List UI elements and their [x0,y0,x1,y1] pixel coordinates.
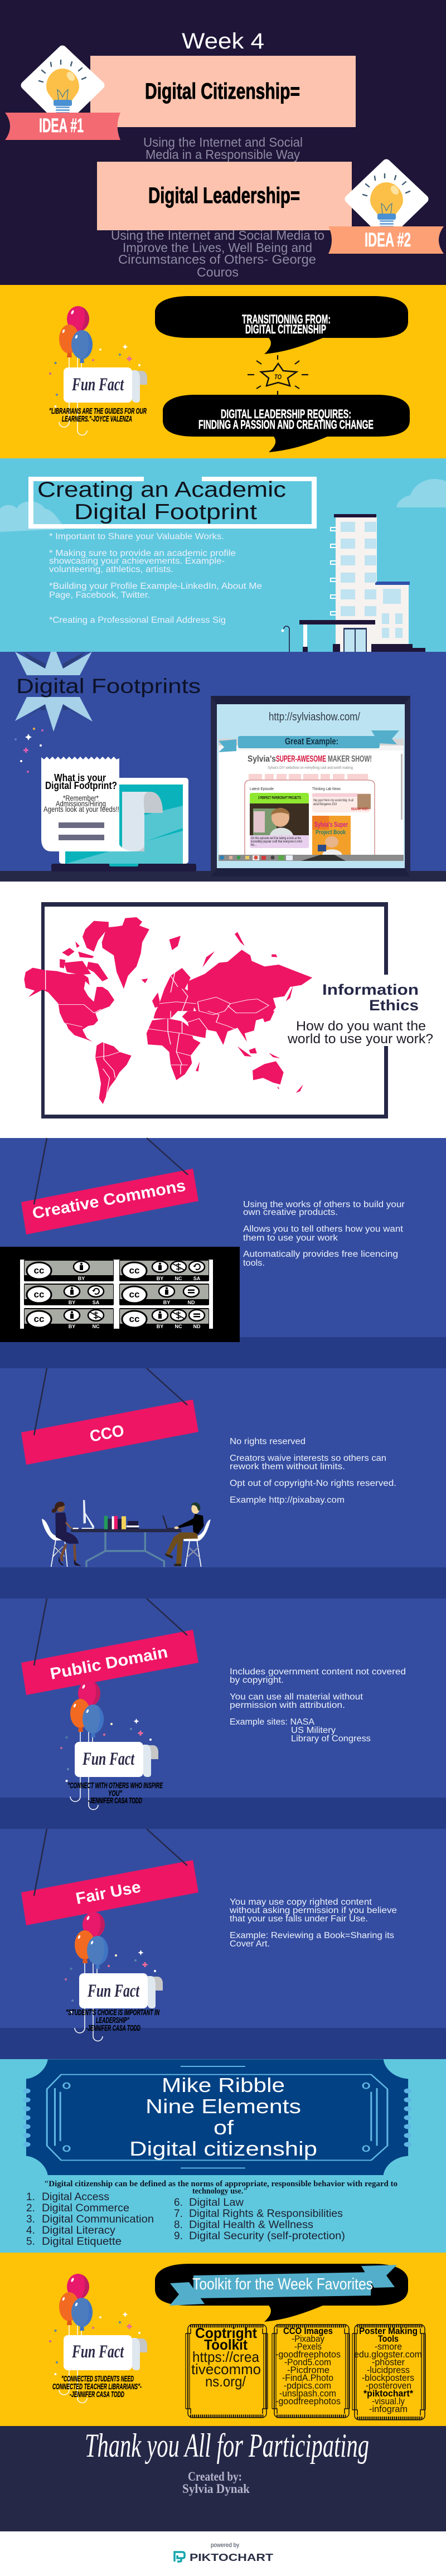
receipt: what is your digital footprint: Agents look at your feeds!! [43,805,119,814]
badge: cc by nc nd: BY [157,1324,163,1329]
screenshot book cover [312,816,351,855]
panel: poster making tools: edu.glogster.com [354,2349,422,2360]
text: public domain: Includes government content not covered [230,1667,406,1677]
label: idea 1: IDEA #1 [39,115,84,137]
text: creative commons: them to use your work [243,1233,338,1243]
clouds [0,479,446,532]
text: cco: No rights reserved [230,1437,306,1446]
icon: star with "to" [248,355,308,395]
heading: digital leadership: Digital Leadership= [148,183,300,208]
badge: cc by nc nd: cc [129,1314,139,1324]
dark floor strip [0,871,446,882]
quote: connected students: "CONNECTED STUDENTS NEED [61,2374,134,2384]
receipt: what is your digital footprint: *Remember* [63,793,99,802]
badge: cc by nd: cc [129,1289,139,1300]
badge: cc by: BY [78,1276,85,1281]
list: elements 1 to 5: Digital Communication [42,2214,154,2225]
icon: star with "to": TO [274,373,282,381]
map: world [24,917,312,1104]
speech bubble: transitioning: DIGITAL CITIZENSHIP [245,322,326,336]
panel: cco images: -Pixabay [292,2333,324,2344]
heading: mike ribble nine elements of digital citizenship: of [214,2116,234,2139]
section: thank you background [0,2426,446,2531]
label: fun fact: Fun Fact [82,1749,135,1769]
text: cco: Opt out of copyright-No rights reserved. [230,1479,396,1488]
panel: cco images: CCO Images [283,2326,333,2336]
badge: cc by nd: ND [187,1300,195,1305]
receipt: what is your digital footprint: Digital Footprint? [45,780,117,791]
panel: poster making tools: -lucidpress [367,2365,410,2375]
text: fair use [229,1897,397,1949]
text: fair use: You may use copy righted content [230,1897,372,1907]
panel: poster making tools [352,2325,425,2420]
badge: cc by sa: SA [93,1300,100,1305]
monitor [81,1500,94,1529]
keyboard [72,1528,79,1529]
speech bubble: toolkit [155,2264,408,2322]
text: fair use: Cover Art. [230,1939,270,1949]
quote: Jennifer Casa Todd: YOU" [108,1789,123,1798]
label: idea 2: IDEA #2 [365,229,411,251]
text: leadership definition: Using the Internet and Social Media to [111,228,324,243]
hanging sign: fair use: Fair Use [74,1878,142,1908]
frame: information ethics [41,902,388,1118]
text: url: http://sylviashow.com/ [269,711,360,723]
text: creative commons: tools. [243,1258,265,1268]
hanging sign: creative commons [21,1138,198,1234]
speech bubble: transitioning [155,296,408,354]
screenshot: maker show website: No... [251,844,256,847]
panel: copyright toolkit: ns.org/ [205,2373,246,2390]
screenshot heading: Sylvia's [248,754,276,764]
text: academic footprint points: showcasing your achievements. Example- [49,556,225,566]
panel: poster making tools: -blockposters [362,2372,414,2383]
screenshot: maker show website: about Botogames 2019 [313,803,337,806]
list: elements 1 to 5: Digital Etiquette [42,2236,122,2248]
image: creative commons licence badges [0,1247,240,1342]
hanging sign: cco: CCO [88,1422,125,1446]
logo: piktochart icon [174,2552,185,2562]
quote: student's choice: "STUDENT'S CHOICE IS IMPORTANT IN [66,2008,160,2017]
text: academic footprint points: Page, Facebook, Twitter. [49,590,150,600]
ticket: mike ribble nine elements [23,2059,411,2175]
label: fun fact: Fun Fact [87,1981,140,2001]
badge: cc by nc [24,1308,114,1330]
heading: mike ribble nine elements of digital citizenship [129,2074,317,2160]
text: leadership definition: Circumstances of Others- George [118,252,316,267]
badge: cc by nc nd [119,1308,209,1330]
text: fair use: that your use falls under Fair Use. [230,1914,368,1924]
list: elements 1 to 5: Digital Access [42,2191,109,2203]
badge: cc by nc: NC [93,1324,100,1329]
footer: powered by: powered by [211,2542,239,2549]
quote: student's choice [66,2008,160,2033]
list: elements 6 to 9: 6. [174,2197,183,2209]
speech bubble: digital leadership requires: DIGITAL LEADERSHIP REQUIRES: [221,407,351,421]
list: elements 1 to 5: Digital Commerce [42,2202,129,2214]
panel: poster making tools: -infogram [369,2404,408,2414]
screenshot heading: MAKER SHOW! [328,754,372,764]
text: creative commons: own creative products. [243,1208,338,1217]
text: created by: Sylvia Dynak [182,2482,250,2496]
text: public domain: permission with attribution. [230,1701,345,1710]
screenshot: maker show website: Thinking Lab News [312,787,341,791]
list: elements 6 to 9: Digital Rights & Responsibilities [189,2208,343,2220]
quote: digital citizenship definition: "Digital citizenship can be defined as the norms of appropriate, responsible behavior with regard to [44,2180,397,2188]
logo: piktochart wordmark: PIKTOCHART [190,2552,273,2563]
ribbon: toolkit for the week favorites [169,2265,397,2306]
screenshot: maker show website: READ MY POST! [351,808,369,811]
ribbon: great example: Great Example: [285,736,338,747]
text: academic footprint points: *Creating a Professional Email Address Sig [49,616,226,625]
fun fact: balloons and scroll 3 [65,1912,163,2041]
section: toolkit background [0,2253,446,2426]
panel: cco images: -Pond5.com [284,2357,331,2367]
quote: connected students: -JENNIFER CASA TODD [70,2390,124,2399]
quote: Jennifer Casa Todd: "CONNECT WITH OTHERS WHO INSPIRE [67,1781,163,1790]
heading: creating an academic digital footprint [37,478,286,524]
list: elements 1 to 5: 5. [26,2236,35,2248]
text: cco: rework them without limits. [230,1462,345,1471]
speech bubble: digital leadership requires [163,395,410,452]
receipt: what is your digital footprint [41,757,163,851]
panel: poster making tools: -posteroven [366,2380,411,2391]
label: fun fact: Fun Fact [71,375,124,395]
hanging sign: fair use [21,1829,198,1925]
panel: copyright toolkit: https://crea [192,2349,259,2365]
text: academic footprint points [49,532,262,625]
section: nine elements background [0,2059,446,2253]
ribbon: idea 1 [5,113,120,140]
panel: cco images: -Pexels [294,2341,322,2352]
quote: student's choice: LEADERSHIP" [96,2016,130,2025]
section: intro background [0,0,446,285]
text: how do you want the world to use your work: world to use your work? [287,1032,433,1047]
panel: poster making tools: -phoster [372,2357,405,2367]
panel: digital citizenship [5,50,356,140]
list: elements 1 to 5: Digital Literacy [42,2225,116,2236]
panel: copyright toolkit [186,2325,268,2418]
list: elements 6 to 9: 7. [174,2208,183,2220]
quote: Joyce Valenza: LEARNERS."-JOYCE VALENZA [62,414,132,424]
badge: cc by sa: BY [69,1300,75,1305]
text: cco: Creators waive interests so others can [230,1454,386,1463]
section: licence panels background [0,1138,446,2059]
quote: digital citizenship definition [44,2180,397,2196]
section: academic footprint background [0,458,446,652]
illustration: building [281,514,425,652]
panel: poster making tools: Poster Making [359,2326,418,2336]
text: cco [230,1437,396,1505]
screenshot heading [248,754,372,764]
screenshot: maker show website: Hey guys! Here's my second blog. Its all [313,799,353,802]
text: creative commons: Automatically provides free licencing [243,1250,398,1259]
badge: cc by nd: BY [163,1300,170,1305]
badge: cc by nc sa [119,1260,209,1281]
panel: copyright toolkit: Coptright [195,2325,257,2341]
list: elements 1 to 5 [26,2191,154,2248]
panel: poster making tools: *piktochart* [363,2388,413,2399]
heading: digital footprints: Digital Footprints [16,675,201,698]
text: cco: Example http://pixabay.com [230,1495,345,1505]
woman [42,1502,81,1567]
text: academic footprint points: *Building your Profile Example-LinkedIn, About Me [49,582,262,591]
receipt: what is your digital footprint: Admissions/Hiring [56,799,106,808]
text: information ethics [322,981,419,1014]
panel: copyright toolkit: Toolkit [204,2336,248,2353]
quote: Jennifer Casa Todd: -JENNIFER CASA TODD [88,1796,142,1805]
section: information ethics background [0,882,446,1138]
screenshot photo [250,803,309,835]
text: leadership definition: Couros [197,265,239,279]
badge: cc by sa: cc [34,1289,44,1300]
badge: cc by nc nd: NC [175,1324,182,1329]
text: information ethics: Ethics [369,997,419,1014]
badge: cc by sa [24,1284,114,1305]
text: public domain: You can use all material without [230,1692,363,1702]
panel: copyright toolkit: tivecommo [191,2361,261,2378]
badge: cc by: cc [34,1265,44,1276]
hanging sign: public domain: Public Domain [49,1643,169,1683]
text: how do you want the world to use your work [287,1019,433,1047]
heading: mike ribble nine elements of digital citizenship: Mike Ribble [162,2074,285,2096]
decoration: sparkles [14,728,43,773]
quote: Joyce Valenza: "LIBRARIANS ARE THE GUIDES FOR OUR [49,406,147,416]
text: public domain: by copyright. [230,1676,284,1685]
text: public domain: Example sites: NASA [230,1717,315,1727]
text: fair use: Example: Reviewing a Book=Sharing its [230,1931,394,1940]
text: creative commons [243,1200,405,1268]
screenshot heading: SUPER-AWESOME [276,754,326,764]
books [104,1516,139,1529]
list: elements 1 to 5: 1. [26,2191,35,2203]
list: elements 1 to 5: 2. [26,2202,35,2214]
badge: cc by nc: BY [69,1324,75,1329]
text: creative commons: Using the works of others to build your [243,1200,405,1209]
panel: digital leadership [97,162,444,254]
ribbon: toolkit for the week favorites: Toolkit for the Week Favorites [192,2275,373,2293]
table top [71,1529,181,1532]
illustration: two people working at a table [42,1500,211,1567]
man [162,1503,211,1567]
panel: poster making tools: -visual.ly [372,2396,405,2406]
screenshot taskbar [219,855,404,861]
text: academic footprint points: * Important to Share your Valuable Works. [49,532,224,541]
text: public domain [230,1667,406,1744]
label: fun fact: Fun Fact [71,2342,124,2362]
list: elements 1 to 5: 3. [26,2214,35,2225]
fun fact: balloons and scroll 1 [49,306,147,435]
panel: cco images: -FindA.Photo [282,2372,333,2383]
text: public domain: US Militery [291,1726,336,1735]
text: academic footprint points: * Making sure to provide an academic profile [49,549,236,558]
heading: digital citizenship: Digital Citizenship= [145,79,300,104]
screenshot: maker show website: 3 PERFECT PAPERCRAFT PROJECTS [258,796,301,800]
screenshot: maker show website: incredibly popular craft that everyone is into! [251,840,302,844]
panel: cco images: -unslpash.com [279,2388,336,2399]
heading: mike ribble nine elements of digital citizenship: Digital citizenship [129,2137,317,2160]
heading: mike ribble nine elements of digital citizenship: Nine Elements [146,2095,301,2118]
badge: cc by nc sa: BY [157,1276,163,1281]
badge: cc by nc sa: NC [175,1276,182,1281]
text: citizenship definition: Media in a Responsible Way [146,147,300,162]
panel: cco images: -pdpics.com [284,2380,331,2391]
badge: cc by nc: cc [34,1314,44,1324]
list: elements 6 to 9: 8. [174,2219,183,2231]
text: created by: Created by: [188,2470,242,2483]
fun fact: balloons and scroll 4 [49,2274,147,2403]
frame: academic footprint title [28,477,317,529]
badge: cc by nd [119,1284,209,1305]
badge: cc by nc sa: cc [129,1265,139,1276]
receipt: what is your digital footprint: What is your [54,772,106,783]
list: elements 6 to 9 [174,2197,345,2242]
badge: cc by nc nd: ND [193,1324,201,1329]
panel: cco images: -goodfreephotos [275,2349,341,2360]
hanging sign: creative commons: Creative Commons [31,1177,187,1223]
fun fact: balloons and scroll 2 [60,1681,163,1810]
panel: cco images [272,2325,350,2418]
quote: student's choice: -JENNIFER CASA TODD [86,2023,140,2033]
badge: star behind digital footprints title [15,652,93,732]
ribbon: idea 2 [328,226,444,254]
section: digital footprints background [0,652,446,882]
speech bubble: transitioning: TRANSITIONING FROM: [242,312,331,326]
text: citizenship definition [143,135,303,162]
text: created by [182,2470,250,2496]
list: elements 1 to 5: 4. [26,2225,35,2236]
badge: cc by [24,1260,114,1281]
illustration: laptop [51,778,196,871]
panel: cco images: -Picdrome [287,2365,329,2375]
text: information ethics: Information [322,981,419,998]
panel: cco images: -goodfreephotos [275,2396,341,2406]
list: elements 6 to 9: Digital Security (self-protection) [189,2230,345,2242]
text: leadership definition: Improve the Lives, Well Being and [123,240,312,255]
screenshot book cover: Project Book [316,829,346,836]
quote: digital citizenship definition: technology use." [192,2187,248,2196]
quote: connected students [52,2374,142,2399]
ribbon: great example [219,730,399,752]
text: fair use: without asking permission if you believe [229,1906,397,1915]
list: elements 6 to 9: 9. [174,2230,183,2242]
panel: poster making tools: -smore [375,2341,402,2352]
text: creative commons: Allows you to tell others how you want [243,1224,404,1234]
icon: idea bulb 2 [349,163,424,236]
text: citizenship definition: Using the Internet and Social [143,135,303,149]
icon: idea bulb 1 [25,50,100,122]
quote: Jennifer Casa Todd [67,1781,163,1805]
screenshot: maker show website: Latest Episode [250,787,274,791]
screenshot book cover: Sylvia's Super [314,820,348,829]
quote: connected students: CONNECTED TEACHER LIBRARIANS"- [52,2382,142,2391]
hanging sign: public domain [21,1599,198,1695]
table legs [86,1532,164,1567]
screenshot: maker show website: Sylvia's DIY webshow on everything cool and worth making [268,766,353,770]
panel: poster making tools: Tools [378,2333,399,2344]
quote: Joyce Valenza [49,406,147,424]
text: public domain: Library of Congress [291,1734,371,1744]
heading: creating an academic digital footprint: Digital Footprint [74,500,257,524]
badge: cc by nc sa: SA [193,1276,201,1281]
heading: creating an academic digital footprint: Creating an Academic [37,478,286,502]
text: how do you want the world to use your work: How do you want the [296,1019,426,1034]
section: transition background [0,285,446,458]
text: academic footprint points: volunteering, athletics, artists. [49,565,173,574]
text: leadership definition [111,228,324,279]
screenshot: maker show website [219,739,404,861]
list: elements 6 to 9: Digital Health & Wellness [189,2219,313,2231]
title: Week 4 [182,29,264,54]
list: elements 6 to 9: Digital Law [189,2197,244,2209]
screenshot: maker show website: On this episode we'll be taking a look at the [251,837,302,840]
panel: website example [211,696,410,877]
hanging sign: cco [21,1368,198,1465]
